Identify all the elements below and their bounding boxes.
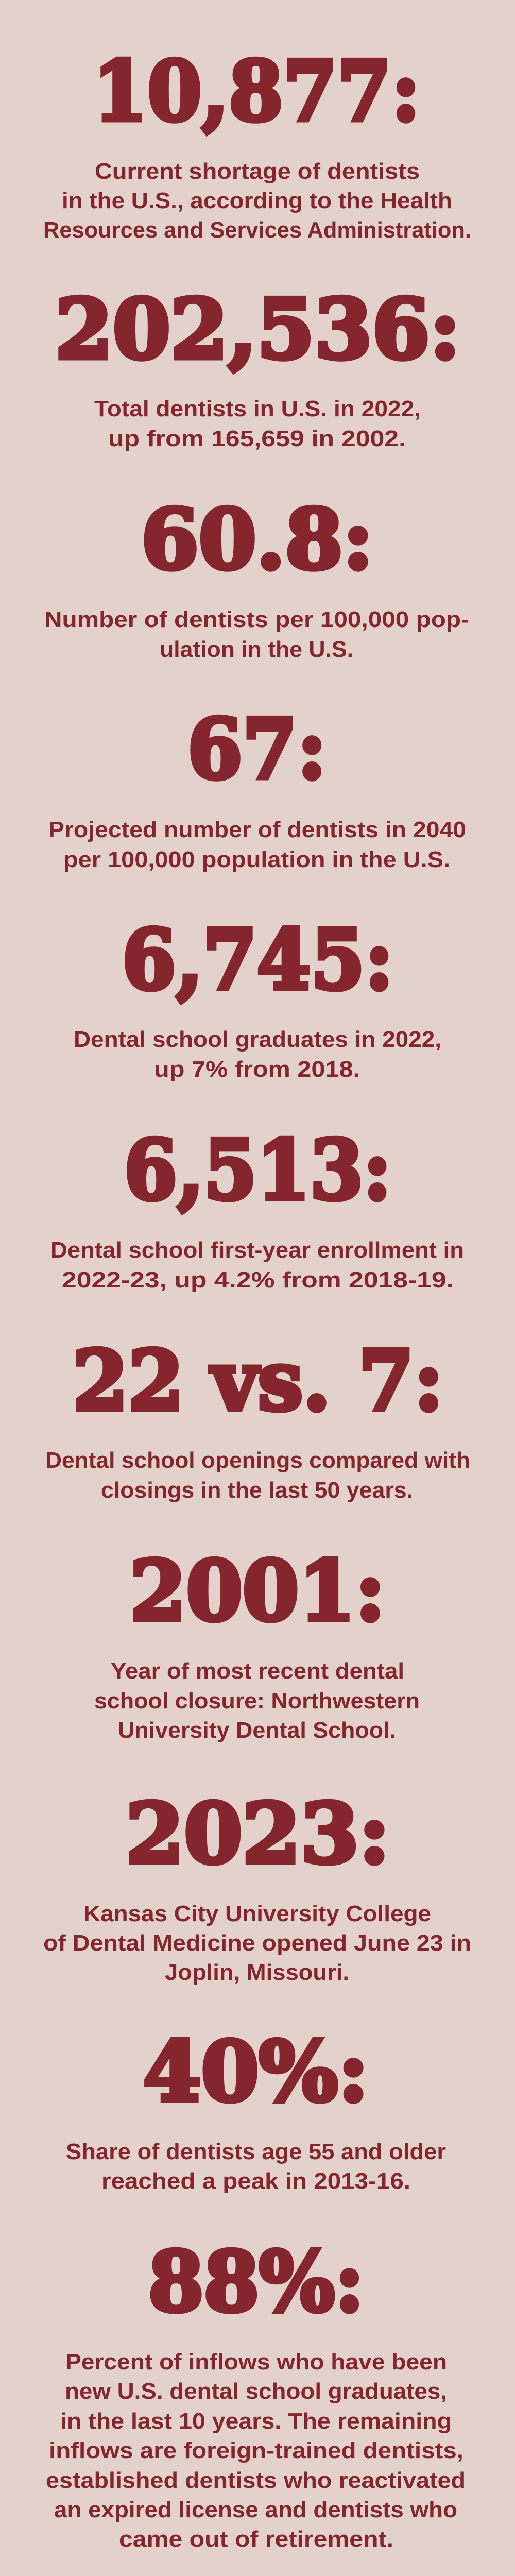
number: 10,877: 10,877:	[93, 43, 420, 140]
description: inflows: new U.S. dental school graduates,	[65, 2379, 447, 2404]
description: inflows: inflows are foreign-trained dentists,	[49, 2438, 464, 2463]
description: share age 55 and older: Share of dentists age 55 and older	[66, 2139, 446, 2164]
stat: inflows	[46, 2233, 466, 2552]
number: 6,745: 6,745:	[122, 911, 393, 1008]
description: dentists per 100,000	[44, 607, 469, 662]
description: inflows	[46, 2349, 466, 2552]
description: enrollment: 2022-23, up 4.2% from 2018-19.	[62, 1267, 454, 1293]
description: newest school	[43, 1901, 471, 1985]
description: newest school: of Dental Medicine opened June 23 in	[43, 1930, 471, 1956]
description: total dentists: Total dentists in U.S. in 2022,	[94, 396, 421, 421]
stat: first-year enrollment	[50, 1122, 464, 1293]
description: most recent closure: University Dental School.	[118, 1718, 396, 1743]
description: shortage: Resources and Services Administration.	[43, 217, 471, 243]
description: graduates	[74, 1027, 441, 1082]
description: shortage: Current shortage of dentists	[95, 159, 420, 184]
description: share age 55 and older	[66, 2139, 446, 2194]
description: dentists per 100,000: ulation in the U.S.	[160, 637, 353, 662]
stat: newest school	[43, 1785, 471, 1985]
stat: total dentists	[55, 281, 460, 451]
number: 22 vs. 7: 22 vs. 7:	[73, 1332, 443, 1429]
description: projected dentists: Projected number of dentists in 2040	[48, 817, 466, 842]
description: newest school: Kansas City University College	[83, 1901, 431, 1926]
description: share age 55 and older: reached a peak in 2013-16.	[101, 2168, 410, 2194]
description: total dentists: up from 165,659 in 2002.	[108, 426, 406, 451]
description: most recent closure: Year of most recent dental	[111, 1658, 404, 1684]
description: graduates: up 7% from 2018.	[154, 1057, 360, 1082]
description: graduates: Dental school graduates in 2022,	[74, 1027, 441, 1052]
description: openings vs closings	[45, 1448, 470, 1503]
description: inflows: an expired license and dentists who	[54, 2497, 457, 2522]
description: enrollment	[50, 1238, 464, 1293]
number: 2001: 2001:	[130, 1543, 385, 1639]
description: shortage: in the U.S., according to the Health	[62, 188, 452, 213]
number: 40%: 40%:	[143, 2023, 369, 2120]
stat: openings vs closings	[45, 1332, 470, 1503]
description: inflows: in the last 10 years. The remaining	[60, 2409, 452, 2434]
stat: dentists per 100,000	[44, 491, 469, 662]
stat: most recent closure	[94, 1543, 420, 1743]
number: 6,513: 6,513:	[124, 1122, 391, 1218]
description: openings vs closings: Dental school openings compared with	[45, 1448, 470, 1473]
description: inflows: established dentists who reactivated	[46, 2468, 466, 2493]
description: most recent closure	[94, 1658, 420, 1743]
stat: current shortage	[43, 43, 471, 243]
stat: share age 55 and older	[66, 2023, 446, 2194]
stat: graduates	[74, 911, 441, 1082]
description: shortage	[43, 159, 471, 243]
description: enrollment: Dental school first-year enrollment in	[50, 1238, 464, 1263]
description: dentists per 100,000: Number of dentists per 100,000 pop-	[44, 607, 469, 632]
description: most recent closure: school closure: Northwestern	[94, 1688, 420, 1714]
number: 60.8: 60.8:	[141, 491, 373, 588]
number: 88%: 88%:	[148, 2233, 364, 2330]
stat: projected dentists	[48, 701, 466, 872]
description: inflows: came out of retirement.	[119, 2527, 393, 2552]
description: total dentists	[94, 396, 421, 451]
description: openings vs closings: closings in the last 50 years.	[101, 1478, 413, 1503]
number: 2023: 2023:	[126, 1785, 390, 1882]
number: 202,536: 202,536:	[55, 281, 460, 378]
description: newest school: Joplin, Missouri.	[165, 1960, 349, 1985]
description: projected dentists: per 100,000 population in the U.S.	[63, 847, 450, 872]
description: inflows: Percent of inflows who have been	[65, 2349, 447, 2375]
description: projected dentists	[48, 817, 466, 872]
number: 67: 67:	[187, 701, 327, 798]
